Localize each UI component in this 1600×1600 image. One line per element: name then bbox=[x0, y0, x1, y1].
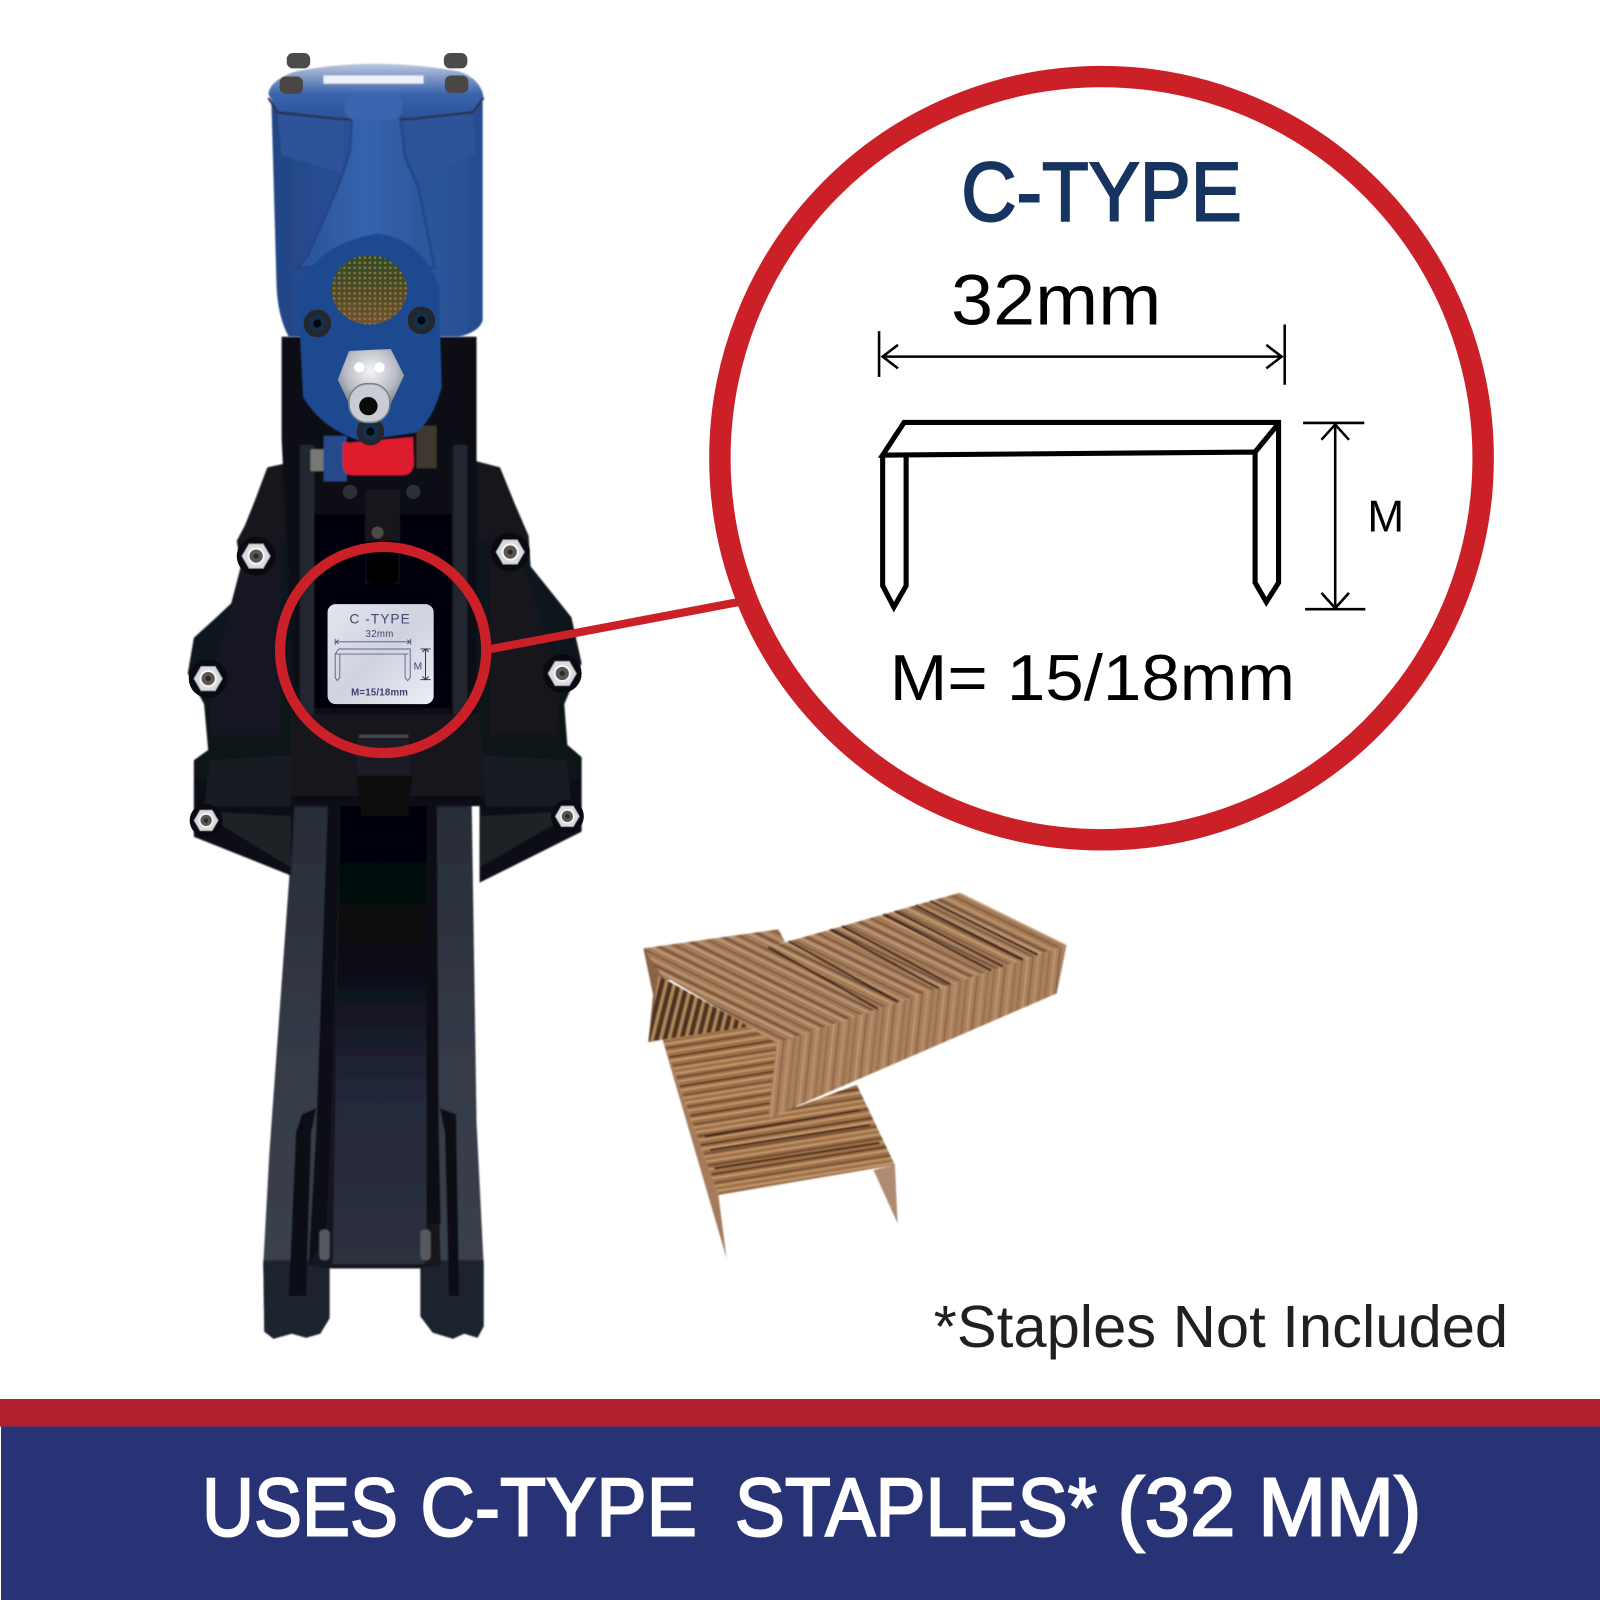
banner headline: USES bbox=[202, 1461, 398, 1554]
footer banner bbox=[0, 1399, 1600, 1600]
connector line from small circle to large circle bbox=[486, 602, 739, 650]
height value text: M= 15/18mm bbox=[890, 641, 1295, 714]
blue cylinder body bbox=[268, 64, 484, 337]
blue nose and air inlet bbox=[298, 95, 442, 441]
note: staples not included: *Staples Not Included bbox=[934, 1293, 1508, 1360]
upper staple side face bbox=[768, 945, 1067, 1118]
heading: C-TYPE: C-TYPE bbox=[961, 144, 1242, 238]
staple type label on tool: M bbox=[414, 661, 422, 672]
red trigger button and fittings bbox=[310, 426, 437, 482]
height label M: M bbox=[1367, 491, 1404, 542]
air fitting bbox=[338, 349, 404, 422]
frame nuts bbox=[189, 485, 584, 837]
banner headline bbox=[202, 1461, 1421, 1554]
air filter mesh bbox=[332, 255, 407, 324]
zoom callout: C-type staple specification bbox=[720, 77, 1483, 840]
staple type label on tool: M=15/18mm bbox=[351, 687, 408, 698]
red stripe bbox=[0, 1399, 1600, 1427]
product photo: pneumatic stapler bbox=[188, 53, 584, 1339]
height dimension arrow bbox=[1303, 423, 1365, 609]
left underside bbox=[643, 948, 663, 1042]
staple type label on tool: 32mm bbox=[366, 629, 394, 640]
banner headline: STAPLES* bbox=[735, 1461, 1097, 1554]
back staple top strip bbox=[643, 929, 785, 982]
navy band bbox=[1, 1427, 1600, 1600]
large red ring bbox=[720, 77, 1483, 840]
staple type label on tool: C -TYPE bbox=[349, 611, 411, 626]
staple type label on tool bbox=[328, 604, 434, 704]
top bolts bbox=[280, 53, 468, 94]
width label: 32mm bbox=[951, 260, 1161, 340]
width dimension arrow bbox=[879, 324, 1285, 385]
side wings of frame bbox=[188, 461, 582, 883]
lower staple bbox=[662, 1005, 898, 1258]
upper staple top face bbox=[665, 893, 1067, 1043]
face screws bbox=[304, 307, 435, 445]
photo: copper staples bbox=[643, 893, 1067, 1258]
callout ring on tool label bbox=[280, 547, 486, 753]
central frame bbox=[282, 337, 486, 816]
banner headline: C-TYPE bbox=[420, 1461, 697, 1554]
magazine rail bbox=[263, 786, 484, 1339]
staple outline diagram bbox=[883, 422, 1279, 607]
banner headline: (32 MM) bbox=[1117, 1461, 1421, 1554]
